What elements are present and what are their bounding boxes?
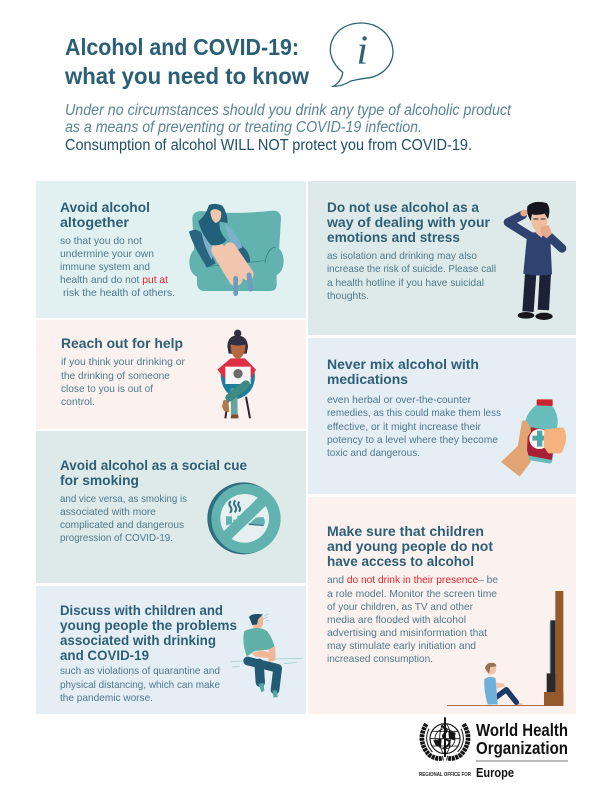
heading: social cue for smoking: for smoking [60,472,139,488]
body text: as isolation and drinking may also [327,251,477,262]
body text: and vice versa, as smoking is [60,494,187,505]
panel: avoid alcohol as a social cue [36,431,306,583]
body text: toxic and dangerous. [327,448,420,459]
heading: emotions and stress: Do not use alcohol as a [327,199,479,215]
heading: access to alcohol: Make sure that children [327,523,484,539]
icon: stressed man [508,202,562,320]
icon: child watching television [447,591,563,706]
body text: health and do not put at [60,275,168,286]
panel: discuss with children [36,586,306,714]
body text [61,357,186,408]
body text: such as violations of quarantine and [60,666,220,677]
title: what you need to know [64,63,309,89]
heading: emotions and stress: emotions and stress [327,229,460,245]
heading: discuss with children [60,602,237,663]
title: Alcohol and COVID-19: [65,34,299,60]
body text: if you think your drinking or [61,357,186,368]
heading: social cue for smoking [60,457,247,488]
heading: avoid alcohol altogether: altogether [60,214,130,230]
heading: avoid alcohol altogether: Avoid alcohol [60,199,150,215]
icon: woman on sofa [189,204,284,294]
icon: seated worried man [231,614,302,698]
body text: of your children, as TV and other [327,602,474,613]
intro text: as a means of preventing or treating COVID-19 infection. [65,119,422,136]
body text: media are flooded with alcohol [327,615,466,626]
body text: the pandemic worse. [60,693,153,704]
body text [327,251,496,302]
body text: progression of COVID-19. [60,533,173,544]
icon: hand holding bottle [501,399,566,477]
body text: complicated and dangerous [60,520,184,531]
heading: emotions and stress: way of dealing with your [326,214,491,230]
icon: WHO emblem [422,717,468,759]
regional office line: Europe [476,765,514,780]
intro text: Consumption of alcohol WILL NOT protect you from COVID-19. [65,137,472,154]
heading: discuss with children: Discuss with children and [60,602,223,618]
heading: access to alcohol: and young people do not [327,538,493,554]
heading: emotions and stress [326,199,491,245]
logo: World Health Organization Regional Office for Europe [419,717,568,780]
wordmark: Organization [476,738,568,758]
body text: undermine your own [60,249,154,260]
heading: never mix [327,356,479,387]
body text [327,395,501,459]
regional office line: REGIONAL OFFICE FOR [419,772,471,778]
body text [60,494,187,544]
panel: never mix alcohol with medications [308,338,576,494]
body text: a health hotline if you have suicidal [327,278,484,289]
heading: social cue for smoking: Avoid alcohol as a social cue [60,457,247,473]
body text: the drinking of someone [61,371,170,382]
body text: immune system and [60,262,150,273]
body text [60,236,175,299]
heading: reach out for help: Reach out for help [61,335,183,351]
body text: control. [61,397,95,408]
icon: no smoking sign [207,482,281,554]
icon: information speech bubble [330,23,393,86]
heading: discuss with children: and COVID-19 [60,647,149,663]
heading: never mix: medications [327,371,408,387]
body text: increased consumption. [327,654,433,665]
wordmark: World Health [476,720,568,740]
regional office line [419,765,514,780]
icon: information speech bubble: i [357,27,368,73]
body text: advertising and misinformation that [327,628,487,639]
body text: effective, or it might increase their [327,422,482,433]
heading: discuss with children: young people the problems [60,617,237,633]
body text [60,666,220,704]
heading: discuss with children: associated with drinking [60,632,216,648]
body text: thoughts. [327,291,369,302]
panel: reach out for help [36,320,306,429]
heading: never mix: Never mix alcohol with [327,356,479,372]
icon: person with laptop [217,330,256,418]
body text: potency to a level where they become [327,435,498,446]
body text: a role model. Monitor the screen time [327,589,497,600]
heading: avoid alcohol altogether [60,199,150,230]
body text: remedies, as this could make them less [327,408,501,419]
body text [327,575,498,665]
panel: do not use alcohol for stress [308,181,576,335]
heading: access to alcohol [327,523,493,569]
intro text [65,102,512,154]
body text: associated with more [60,507,156,518]
body text: close to you is out of [61,384,153,395]
body text: increase the risk of suicide. Please call [327,264,496,275]
intro text: Under no circumstances should you drink any type of alcoholic product [65,102,512,119]
panel: children and young people access [308,497,576,714]
panel: avoid alcohol altogether [36,181,306,318]
body text: even herbal or over-the-counter [327,395,472,406]
body text: may stimulate early initiation and [327,641,476,652]
heading: access to alcohol: have access to alcohol [327,553,474,569]
body text: physical distancing, which can make [60,680,220,691]
wordmark [476,720,568,758]
title [64,34,309,89]
body text: risk the health of others. [63,288,175,299]
body text: and do not drink in their presence– be [327,575,498,586]
body text: so that you do not [60,236,142,247]
